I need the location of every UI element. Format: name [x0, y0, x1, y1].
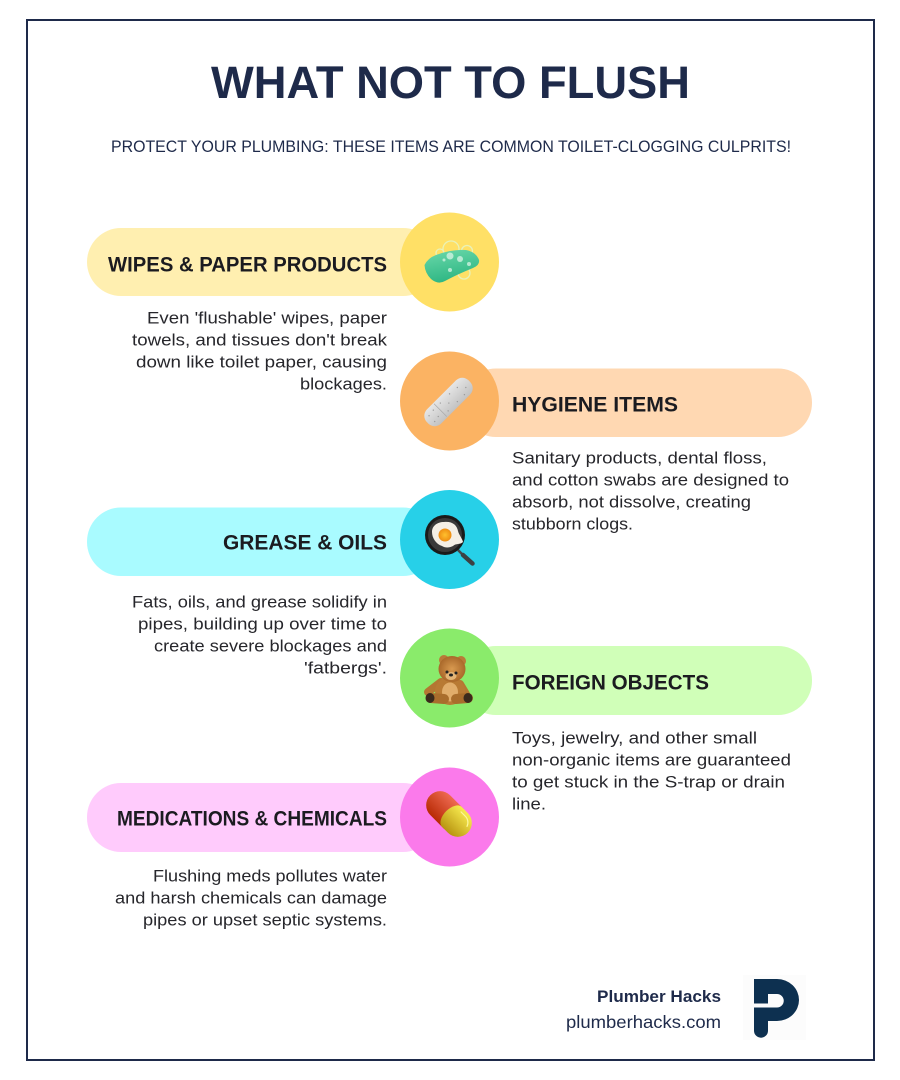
heading pill: hygiene	[462, 368, 812, 437]
description: grease: 'fatbergs'.	[304, 658, 387, 678]
icon circle: hygiene	[400, 352, 499, 450]
title: WHAT NOT TO FLUSH	[211, 57, 690, 108]
description: foreign objects: line.	[512, 794, 546, 814]
description: medications	[115, 866, 387, 930]
heading: hygiene: HYGIENE ITEMS	[512, 394, 678, 416]
panel: medications and chemicals	[87, 768, 499, 930]
description: grease: Fats, oils, and grease solidify in	[132, 592, 387, 612]
description: medications: and harsh chemicals can damage	[115, 888, 387, 908]
description: medications: pipes or upset septic systems.	[143, 910, 387, 930]
heading pill: medications	[87, 783, 437, 852]
icon: capsule pill	[420, 785, 478, 843]
icon: bandage	[421, 374, 476, 430]
description: foreign objects: non-organic items are guaranteed	[512, 750, 791, 770]
description: foreign objects: Toys, jewelry, and other small	[512, 728, 757, 748]
icon: teddy bear	[426, 655, 472, 705]
icon: frying pan with egg	[425, 515, 472, 564]
description: wipes: Even 'flushable' wipes, paper	[147, 308, 387, 328]
heading pill: foreign objects	[462, 646, 812, 715]
description: hygiene	[512, 448, 789, 534]
panel: wipes and paper products	[87, 212, 499, 394]
description: foreign objects	[512, 728, 791, 814]
description: foreign objects: to get stuck in the S-trap or drain	[512, 772, 785, 792]
description: wipes: down like toilet paper, causing	[136, 352, 387, 372]
logo: P mark	[743, 975, 806, 1040]
icon circle: foreign objects	[400, 628, 499, 728]
footer: brand name: Plumber Hacks	[597, 988, 721, 1006]
footer: website: plumberhacks.com	[566, 1012, 721, 1032]
subtitle: PROTECT YOUR PLUMBING: THESE ITEMS ARE COMMON TOILET-CLOGGING CULPRITS!	[111, 138, 791, 156]
heading: medications: MEDICATIONS & CHEMICALS	[117, 808, 387, 830]
heading: grease: GREASE & OILS	[223, 532, 387, 554]
description: medications: Flushing meds pollutes water	[153, 866, 387, 886]
description: grease: create severe blockages and	[154, 636, 387, 656]
heading pill: wipes	[87, 228, 437, 296]
description: grease	[132, 592, 387, 678]
icon circle: medications	[400, 768, 499, 866]
panel: hygiene items	[400, 352, 812, 534]
description: wipes: blockages.	[300, 374, 387, 394]
heading: foreign objects: FOREIGN OBJECTS	[512, 672, 709, 694]
heading: wipes: WIPES & PAPER PRODUCTS	[108, 254, 387, 276]
panel: foreign objects	[400, 628, 812, 814]
panel: grease and oils	[87, 490, 499, 678]
description: grease: pipes, building up over time to	[138, 614, 387, 634]
description: hygiene: Sanitary products, dental floss,	[512, 448, 767, 468]
description: hygiene: stubborn clogs.	[512, 514, 633, 534]
description: hygiene: and cotton swabs are designed to	[512, 470, 789, 490]
description: wipes: towels, and tissues don't break	[132, 330, 388, 350]
icon circle: grease	[400, 490, 499, 589]
description: hygiene: absorb, not dissolve, creating	[512, 492, 751, 512]
description: wipes	[132, 308, 388, 394]
icon circle: wipes	[400, 212, 499, 312]
icon: soap bar	[424, 241, 479, 283]
heading pill: grease	[87, 508, 437, 576]
